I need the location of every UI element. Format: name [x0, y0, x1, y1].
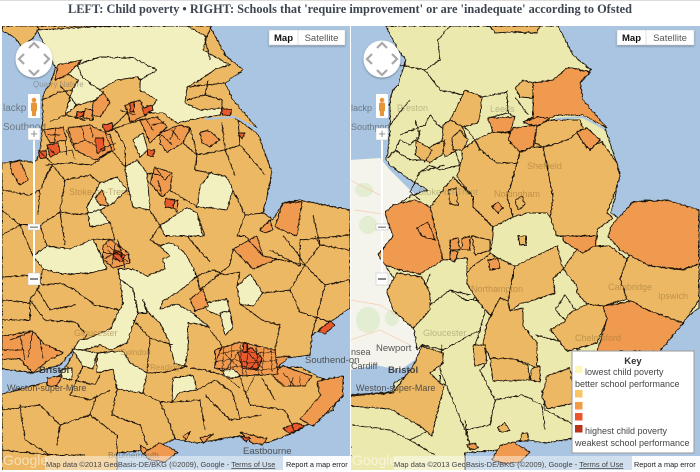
footer attribution: Google	[3, 452, 48, 468]
map type buttons: Satellite	[653, 33, 687, 44]
orange districts	[2, 60, 343, 455]
pegman	[28, 94, 40, 118]
city labels, left: Bristol	[39, 365, 69, 376]
title: LEFT: Child poverty • RIGHT: Schools that 'require improvement' or are 'inadequate' according to Ofsted	[68, 2, 632, 16]
legend: lowest: better school performance	[575, 379, 680, 389]
land base: pale England	[350, 26, 699, 472]
red districts	[38, 102, 335, 442]
base-map labels, right: Cambridge	[608, 282, 652, 292]
legend: level 2	[575, 390, 582, 398]
base-map labels, right: Northampton	[471, 284, 523, 294]
city labels, left	[7, 355, 359, 457]
base-map labels, right: Leeds	[490, 104, 515, 114]
legend: highest	[574, 425, 690, 448]
pegman	[376, 94, 388, 118]
city labels, right: Cardiff	[351, 361, 378, 371]
map type buttons	[269, 30, 345, 45]
pan control	[364, 40, 400, 78]
base-map labels, right: Sheffield	[527, 161, 562, 171]
coast detail	[205, 117, 257, 129]
Wales base-map land	[351, 158, 421, 370]
tan underlay: east midlands	[458, 128, 598, 246]
right map controls	[352, 30, 700, 470]
city labels, left: Eastbourne	[243, 446, 292, 457]
city labels, right: Weston-super-Mare	[356, 383, 435, 393]
legend: lowest: lowest child poverty	[585, 367, 664, 377]
pale district boundaries	[352, 26, 580, 455]
base-map labels, right: Stoke-on-Trent	[418, 187, 478, 197]
map type buttons: Map	[622, 33, 641, 44]
map type buttons: Map	[274, 33, 293, 44]
left map controls	[3, 30, 350, 470]
tan districts	[350, 26, 699, 441]
dense urban boundaries: north west, Yorkshire, Midlands	[2, 105, 180, 360]
zoom slider: +	[30, 126, 38, 141]
orange districts	[378, 67, 699, 464]
base-map labels, left	[3, 80, 180, 460]
map type buttons	[617, 30, 694, 45]
dense London boundaries	[216, 343, 300, 395]
legend title: Key	[624, 356, 642, 367]
base-map labels, right: lackp	[351, 103, 372, 113]
footer attribution: Report a map error	[286, 460, 348, 469]
legend: level 3	[575, 402, 582, 410]
legend: highest: weakest school performance	[574, 438, 690, 448]
base-map labels, left: Reading	[150, 363, 180, 372]
map type buttons: Satellite	[305, 33, 338, 44]
legend: key	[572, 351, 694, 453]
city labels, left: Weston-super-Mare	[7, 383, 86, 393]
Humber estuary	[555, 117, 605, 129]
land base	[2, 26, 40, 47]
city labels, right	[351, 343, 435, 393]
isle of wight	[143, 443, 178, 462]
footer attribution: Report a map error	[634, 460, 696, 469]
base-map labels, right: Nottingham	[494, 189, 540, 199]
base-map labels, right	[351, 103, 688, 343]
footer attribution: Map data ©2013 GeoBasis-DE/BKG (©2009), Google - Terms of Use	[46, 460, 275, 469]
footer attribution: Map data ©2013 GeoBasis-DE/BKG (©2009), Google - Terms of Use	[394, 460, 623, 469]
footer attribution: Google	[352, 452, 397, 468]
pale districts	[33, 26, 263, 402]
base-map labels, right: Southport	[351, 122, 391, 132]
base-map labels, right: Gloucester	[423, 328, 467, 338]
base-map labels, left: Stoke-on-Trent	[69, 187, 129, 197]
city labels, left: Southend-on	[305, 355, 359, 366]
map shapes	[2, 26, 350, 472]
base-map labels, left: Quarry Nature	[33, 80, 84, 89]
zoom slider	[376, 126, 388, 285]
footer attribution	[3, 452, 350, 470]
panel: right map, school performance	[350, 26, 700, 472]
top rule	[0, 0, 700, 1]
base-map labels, right: Ipswich	[658, 291, 688, 301]
Wales base-map features	[355, 183, 399, 333]
tan district boundaries	[2, 26, 350, 455]
city labels, right: Newport	[376, 343, 412, 354]
base-map labels, right: Preston	[397, 103, 428, 113]
city labels, right: nsea	[351, 347, 371, 357]
legend: lowest	[575, 366, 680, 389]
legend: level 4	[575, 413, 582, 420]
base-map labels, left: lackp	[3, 103, 27, 114]
panel: left map, child poverty	[2, 26, 350, 472]
footer attribution	[352, 452, 700, 470]
base-map labels, left: Swindon	[120, 348, 151, 357]
zoom slider: +	[378, 126, 386, 141]
zoom slider	[28, 126, 40, 285]
base-map labels, left: Gloucester	[74, 328, 118, 338]
city labels, right: Bristol	[388, 365, 418, 376]
legend: highest: highest child poverty	[585, 426, 668, 436]
pan control	[16, 40, 52, 78]
pale pocket south of London	[224, 369, 240, 378]
base-map labels, right: Chelmsford	[575, 333, 621, 343]
base-map labels, left: Southport	[3, 122, 47, 133]
base-map labels, left: Bournemouth	[108, 450, 159, 460]
